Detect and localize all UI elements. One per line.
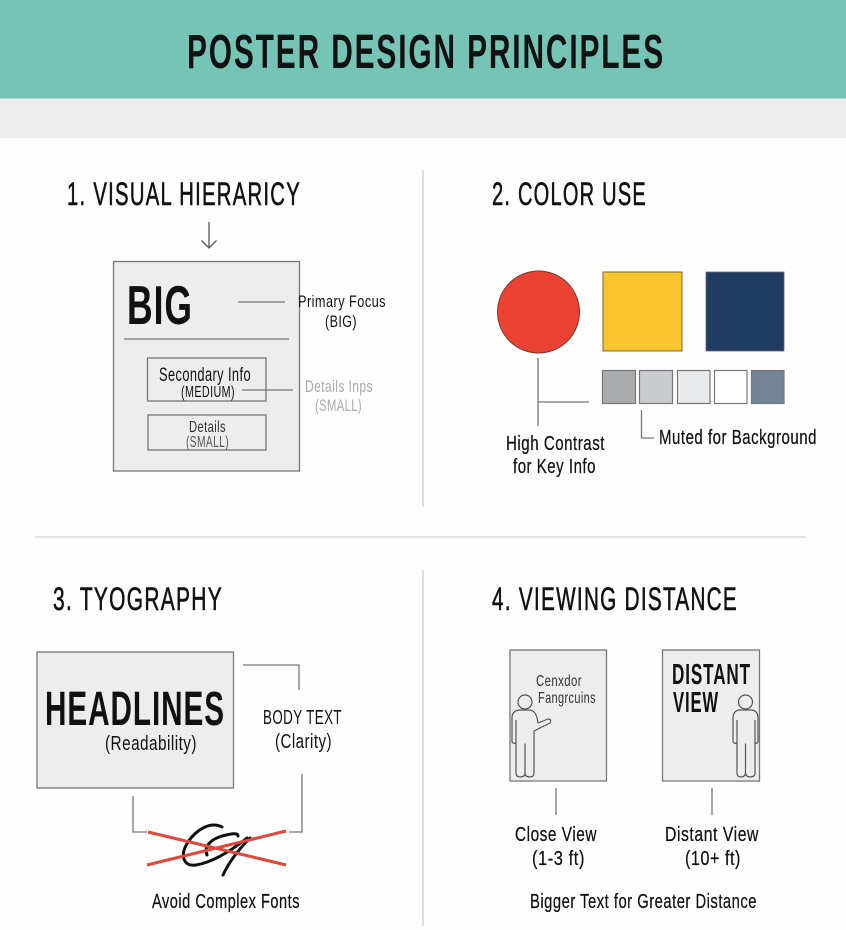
headlines box — [37, 652, 234, 788]
caption: bigger text: Bigger Text for Greater Distance — [530, 891, 757, 913]
close view poster: Cenxdor — [536, 673, 582, 690]
caption: close view: (1-3 ft) — [532, 848, 585, 870]
callout: details small: Details Inps — [305, 377, 373, 396]
heading: typography: 3. TYOGRAPHY — [53, 581, 223, 617]
callout: high contrast: for Key Info — [513, 456, 596, 478]
callout: primary focus — [238, 292, 386, 331]
icon: crossed out script font — [147, 825, 286, 875]
secondary info box: (MEDIUM) — [181, 384, 235, 401]
callout: high contrast — [506, 358, 605, 478]
body text label — [243, 665, 342, 832]
yellow square — [603, 272, 682, 351]
caption: distant view — [665, 788, 759, 870]
secondary info box — [148, 358, 266, 401]
header banner — [0, 0, 846, 138]
red circle — [498, 271, 580, 353]
caption: distant view: Distant View — [665, 824, 759, 846]
heading: color use: 2. COLOR USE — [492, 176, 647, 212]
caption: close view: Close View — [515, 824, 597, 846]
arrow: downward reading flow — [202, 222, 216, 248]
callout: primary focus: (BIG) — [325, 312, 357, 331]
callout: high contrast: High Contrast — [506, 433, 605, 455]
icon: person pointing — [512, 695, 551, 777]
panel: visual hierarchy — [67, 176, 386, 471]
body text label: BODY TEXT — [263, 707, 342, 729]
headlines box: (Readability) — [105, 733, 197, 755]
big headline sample: BIG — [127, 274, 193, 336]
distant view poster — [662, 650, 760, 781]
poster diagram — [114, 262, 300, 471]
callout: primary focus: Primary Focus — [298, 292, 386, 311]
callout: details small: (SMALL) — [315, 396, 362, 415]
details box — [148, 415, 266, 451]
panel: color use — [492, 176, 817, 478]
navy square — [706, 272, 784, 351]
panel: typography — [37, 581, 342, 913]
callout: details small — [242, 377, 373, 415]
callout: muted for background — [642, 410, 817, 449]
distant view poster: DISTANT — [672, 659, 751, 691]
details box: (SMALL) — [186, 434, 229, 451]
caption: close view — [515, 788, 597, 870]
icon: person standing — [733, 695, 758, 777]
caption: distant view: (10+ ft) — [685, 848, 741, 870]
heading: visual hierarchy: 1. VISUAL HIERARICY — [67, 176, 301, 212]
details box: Details — [189, 419, 226, 436]
distant view poster: VIEW — [673, 687, 719, 719]
close view poster: Fangrcuins — [538, 690, 596, 707]
secondary info box: Secondary Info — [159, 365, 251, 386]
panel: viewing distance — [492, 581, 760, 913]
body text label: (Clarity) — [275, 731, 332, 753]
headlines box: HEADLINES — [45, 683, 225, 736]
caption: avoid complex fonts: Avoid Complex Fonts — [152, 891, 300, 913]
muted swatches — [602, 370, 784, 404]
close view poster — [510, 650, 606, 781]
